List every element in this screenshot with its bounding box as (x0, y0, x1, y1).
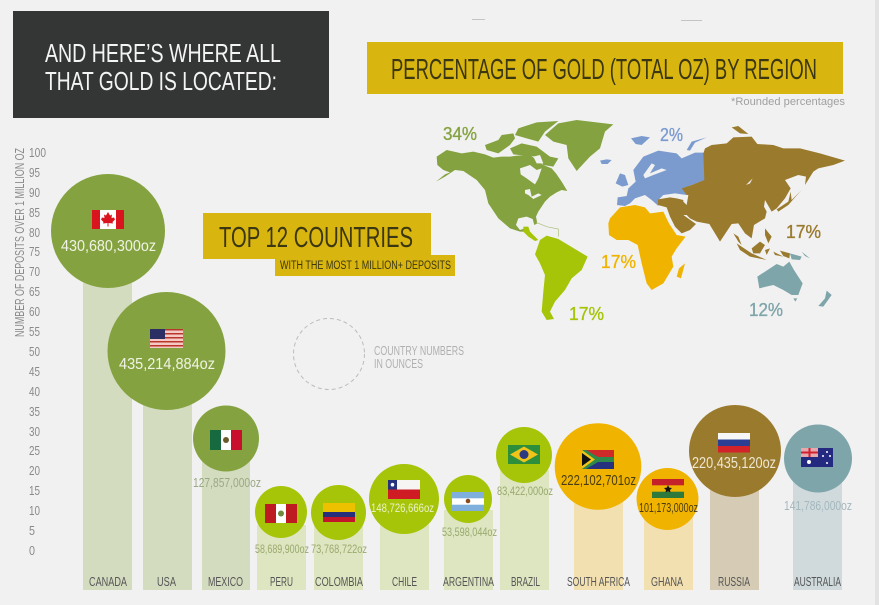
country: Canada: 430,680,300oz (61, 238, 156, 255)
legend: country numbers in ounces: IN OUNCES (374, 356, 423, 371)
heading: top 12 countries: TOP 12 COUNTRIES (219, 222, 413, 254)
country: Colombia: 73,768,722oz (311, 542, 367, 556)
country: Brazil (496, 427, 553, 590)
y axis: 25 (29, 444, 40, 458)
country: Mexico: MEXICO (208, 575, 243, 589)
y axis: 75 (29, 245, 40, 259)
country: Russia: RUSSIA (718, 575, 750, 589)
heading: top 12 countries: WITH THE MOST 1 MILLION+ DEPOSITS (280, 260, 451, 272)
country: Peru: 58,689,900oz (255, 542, 309, 556)
country: Russia (689, 405, 781, 590)
y axis: 15 (29, 484, 40, 498)
y axis: 80 (29, 226, 40, 240)
flag: South Africa (582, 450, 614, 469)
y axis: 70 (29, 265, 40, 279)
y axis: 65 (29, 285, 40, 299)
country: Colombia (311, 485, 367, 590)
y axis: 100 (29, 146, 46, 160)
label: 34%: 34% (443, 123, 477, 144)
legend: country numbers in ounces (294, 318, 464, 390)
note: rounded percentages: *Rounded percentages (731, 96, 846, 108)
label: 17% Asia: 17% (786, 221, 821, 242)
y axis: 30 (29, 425, 40, 439)
heading: percentage by region (367, 42, 843, 94)
country: South Africa (555, 423, 641, 590)
y axis: 35 (29, 405, 40, 419)
y axis: 95 (29, 166, 40, 180)
flag: Peru (265, 504, 297, 523)
country: Ghana: 101,173,000oz (639, 501, 698, 515)
country: Brazil: 83,422,000oz (497, 484, 553, 498)
region: Asia (658, 126, 845, 260)
region: North America (436, 120, 613, 232)
y axis: NUMBER OF DEPOSITS OVER 1 MILLION OZ (12, 148, 27, 337)
label: 17% South America: 17% (569, 303, 604, 324)
country: Peru (255, 486, 309, 590)
country: Argentina (442, 475, 497, 590)
flag: Chile (388, 480, 420, 499)
country: Peru: PERU (270, 575, 293, 589)
country: Brazil: BRAZIL (511, 575, 540, 589)
country: USA (108, 292, 226, 590)
y axis: 5 (29, 524, 35, 538)
flag: Ghana (652, 479, 684, 498)
country: Argentina: ARGENTINA (443, 575, 494, 589)
country: USA: 435,214,884oz (119, 356, 215, 373)
heading: top 12 countries (203, 213, 455, 276)
flag: USA (150, 329, 183, 348)
country: Ghana (636, 468, 698, 590)
country: Mexico (193, 406, 261, 590)
country: Ghana: GHANA (651, 575, 683, 589)
y axis: 0 (29, 544, 35, 558)
title panel: THAT GOLD IS LOCATED: (45, 66, 277, 96)
label: 17% Africa: 17% (601, 251, 636, 272)
label: 12%: 12% (749, 299, 783, 320)
country: South Africa: 222,102,701oz (561, 472, 636, 489)
y axis: 45 (29, 365, 40, 379)
y axis: 10 (29, 504, 40, 518)
flag: Mexico (210, 430, 242, 450)
country: Australia (784, 424, 852, 590)
y axis: 40 (29, 385, 40, 399)
country: Chile: CHILE (392, 575, 417, 589)
y axis (12, 146, 46, 558)
flag: Argentina (452, 492, 484, 511)
label: 2%: 2% (660, 124, 683, 145)
country: Mexico: 127,857,000oz (193, 476, 261, 490)
country: Russia: 220,435,120oz (692, 455, 776, 472)
world map (436, 120, 845, 320)
y axis: 90 (29, 186, 40, 200)
y axis: 20 (29, 464, 40, 478)
flag: Brazil (508, 445, 540, 464)
y axis: 50 (29, 345, 40, 359)
region: Oceania (757, 252, 832, 307)
y axis: 60 (29, 305, 40, 319)
country: Australia: 141,786,000oz (784, 499, 852, 513)
title panel: AND HERE’S WHERE ALL (45, 38, 281, 68)
title panel (13, 11, 329, 118)
country: Chile: 148,726,666oz (371, 501, 434, 515)
country: Argentina: 53,598,044oz (442, 525, 497, 539)
flag: Canada (92, 210, 124, 229)
flag: Colombia (323, 503, 355, 522)
y axis: 55 (29, 325, 40, 339)
country: USA: USA (157, 575, 176, 589)
region: Africa (608, 205, 686, 290)
country: Canada (51, 174, 165, 590)
country: Canada: CANADA (89, 575, 127, 589)
flag: Australia (801, 448, 833, 467)
region: South America (523, 222, 588, 320)
legend: country numbers in ounces: COUNTRY NUMBERS (374, 343, 464, 358)
country: Chile (369, 464, 439, 590)
country: Colombia: COLOMBIA (315, 575, 363, 589)
country: Australia: AUSTRALIA (794, 575, 841, 589)
country: South Africa: SOUTH AFRICA (567, 575, 630, 589)
region: Europe (600, 136, 707, 206)
flag: Russia (718, 433, 750, 452)
y axis: 85 (29, 206, 40, 220)
